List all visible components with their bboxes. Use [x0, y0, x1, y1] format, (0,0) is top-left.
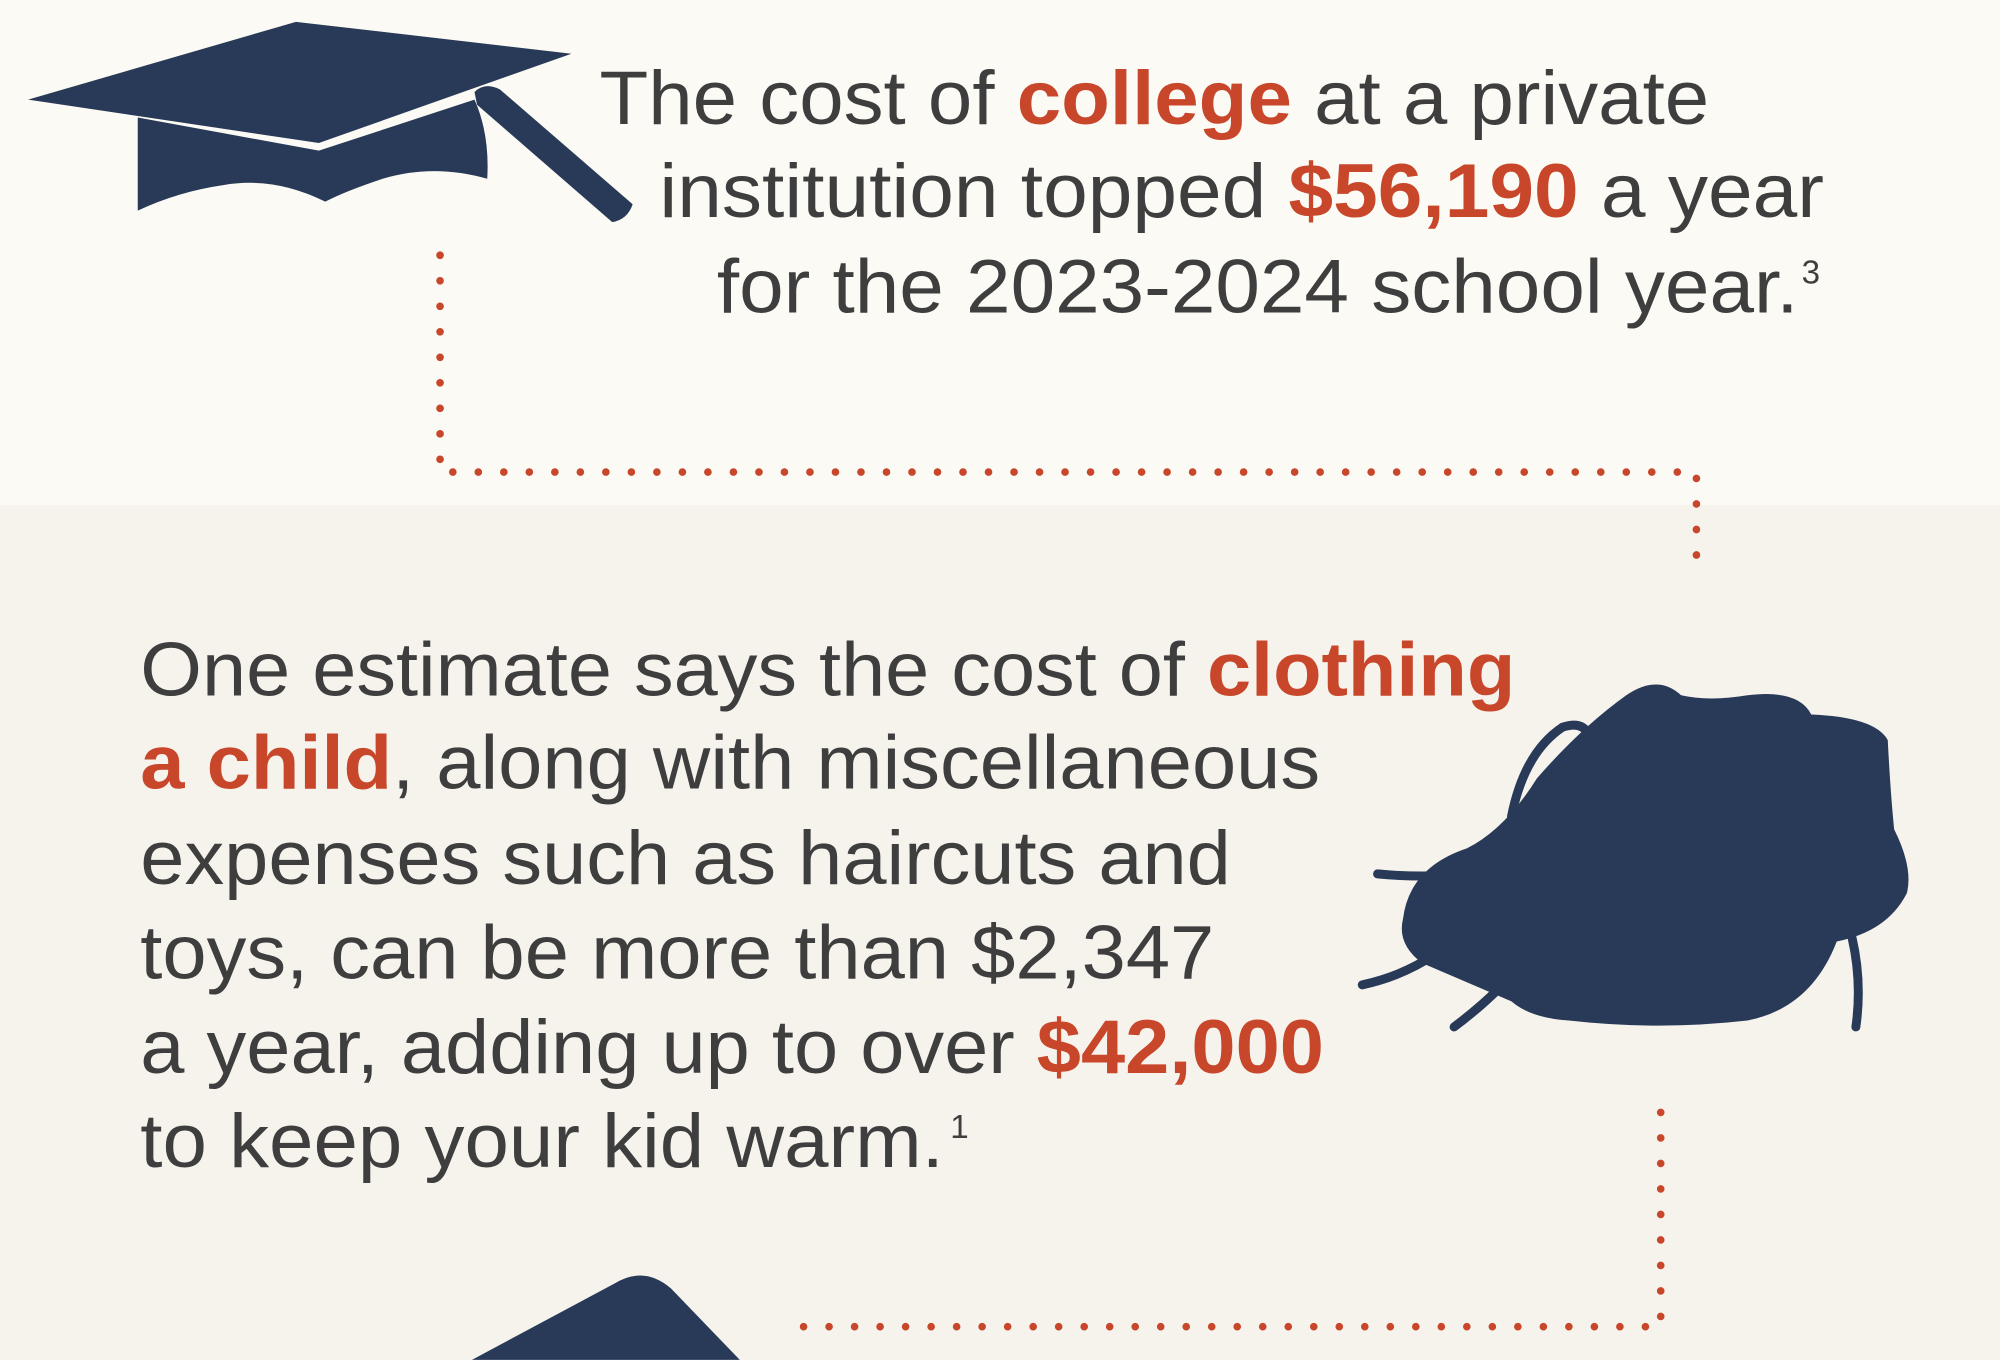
text block: clothing cost — [140, 627, 1515, 1184]
text block: college cost: institution topped $56,190 a year — [659, 149, 1824, 234]
arrow: dotted connector 2 — [778, 1112, 1661, 1327]
text block: clothing cost: a year, adding up to over $42,000 — [140, 1005, 1324, 1090]
text block: college cost: for the 2023-2024 school year. — [717, 245, 1798, 330]
icon: graduation cap — [28, 22, 633, 222]
icon: baby shoe — [1362, 684, 1908, 1027]
text block: clothing cost: toys, can be more than $2,347 — [140, 910, 1214, 995]
text block: college cost: The cost of college at a private — [599, 56, 1709, 141]
text block: clothing cost: expenses such as haircuts and — [140, 816, 1231, 901]
text block: college cost — [599, 56, 1824, 330]
text block: clothing cost: 1 — [950, 1109, 969, 1146]
text block: clothing cost: One estimate says the cost of clothing — [140, 627, 1515, 712]
text block: clothing cost: to keep your kid warm. — [140, 1099, 944, 1184]
text block: clothing cost: a child, along with miscellaneous — [140, 720, 1320, 805]
arrow: dotted connector 1 — [440, 255, 1696, 574]
icon: partial next item — [472, 1276, 740, 1360]
text block: college cost: 3 — [1802, 254, 1820, 291]
